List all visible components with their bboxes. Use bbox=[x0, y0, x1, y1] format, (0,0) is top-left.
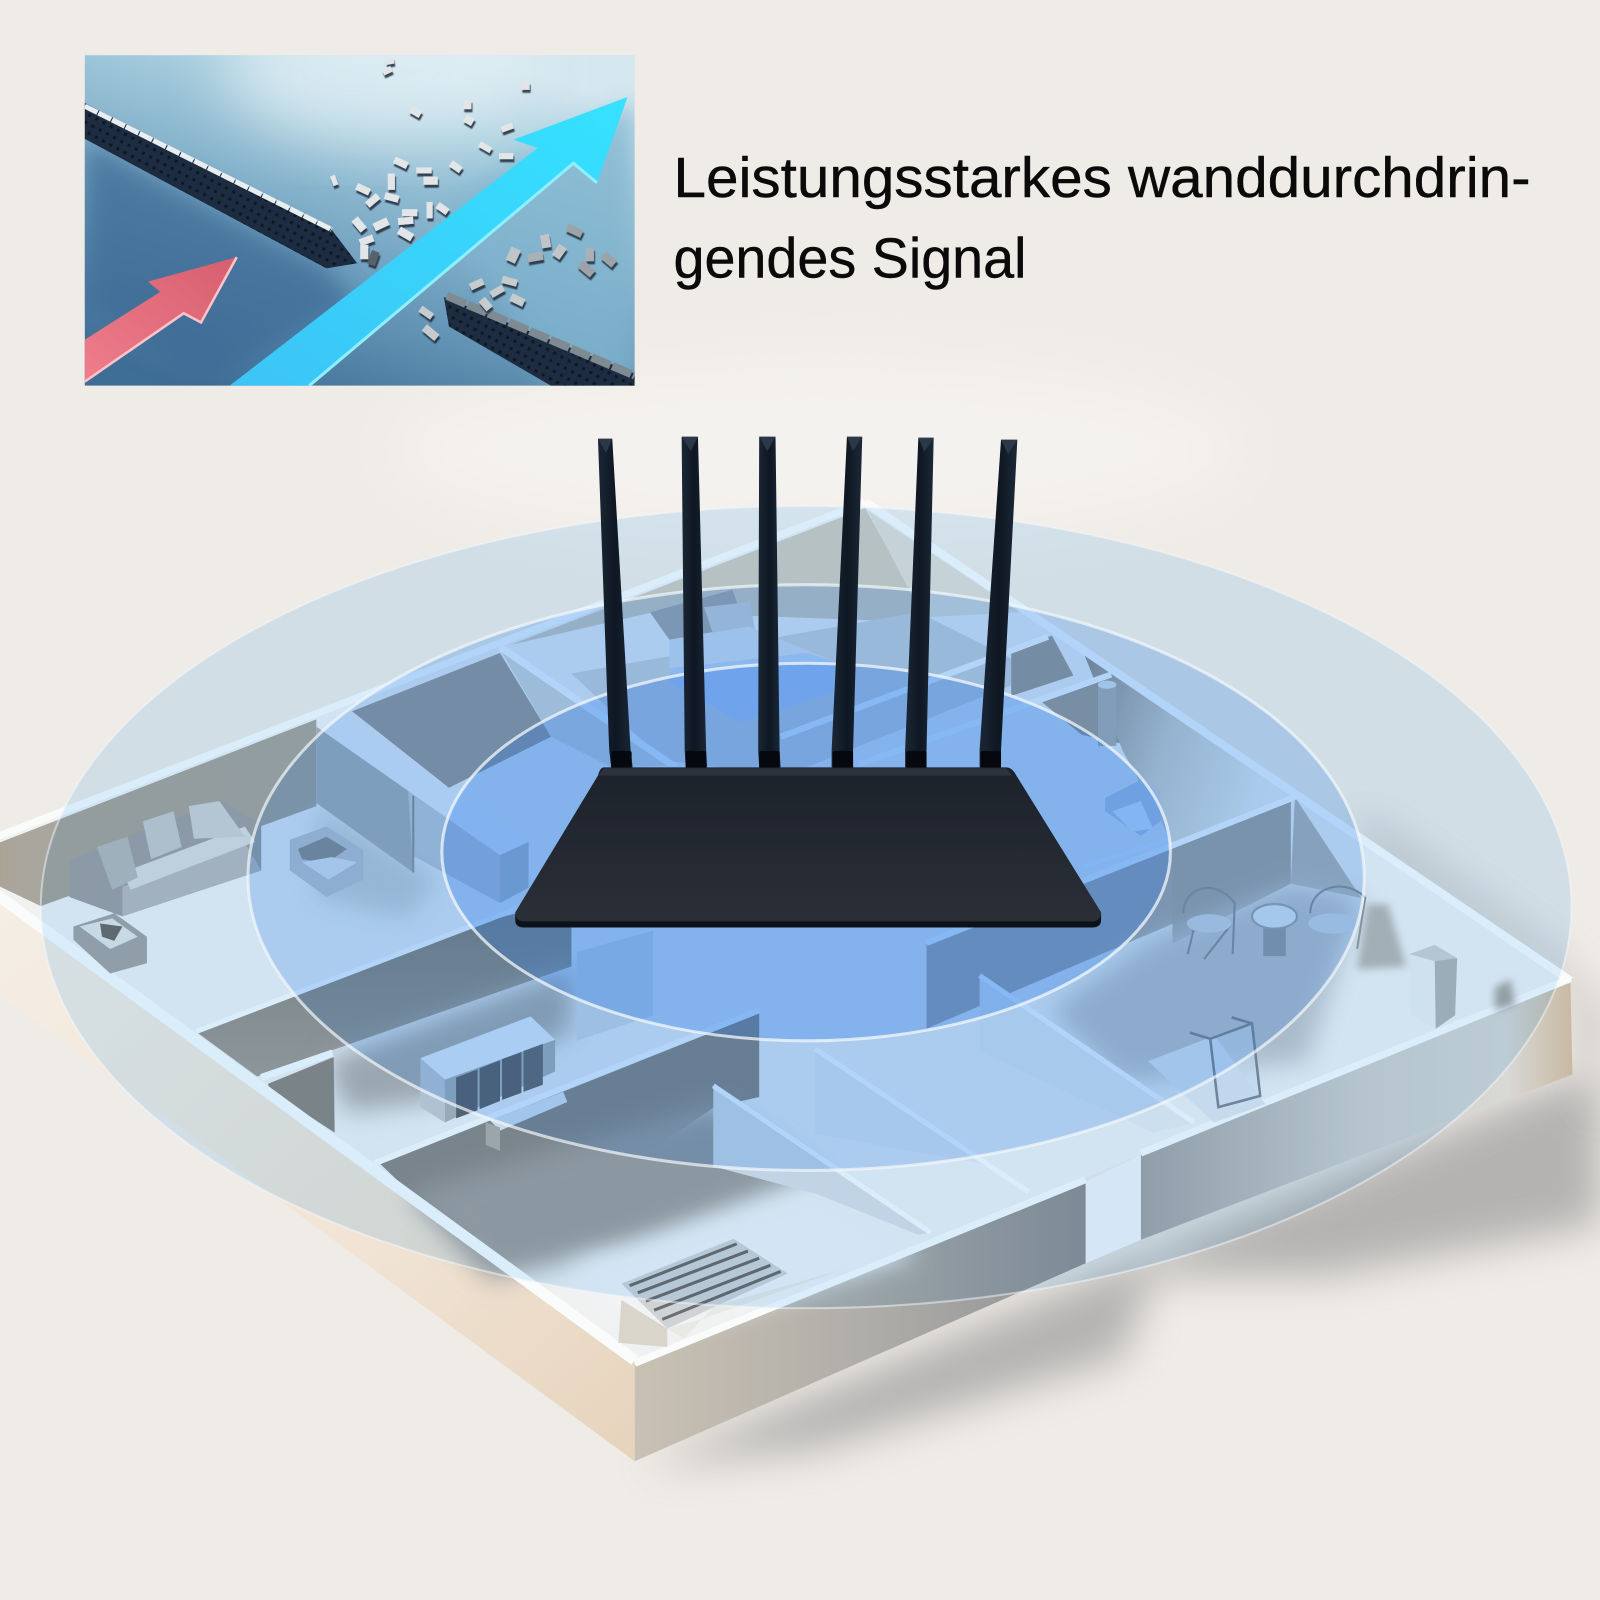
heading line two: gendes Signal bbox=[673, 227, 1027, 290]
router body bbox=[515, 767, 1101, 927]
ring outlines bbox=[41, 506, 1571, 1308]
furniture: chairs and table bbox=[1184, 887, 1365, 959]
photo highlight bbox=[206, 55, 522, 174]
upper left room side wall bbox=[500, 649, 673, 767]
ground shadow bbox=[643, 1078, 1600, 1465]
doorway through wall bbox=[1086, 1155, 1141, 1263]
chair room floor shade bbox=[1051, 884, 1361, 1082]
furniture: small sofa bbox=[73, 913, 147, 973]
antenna 5 bbox=[905, 438, 934, 770]
blue arrow highlight edge bbox=[309, 163, 597, 386]
lower broken wall bbox=[444, 296, 635, 386]
heading text bbox=[673, 146, 1531, 290]
south-east outer wall, left part bbox=[635, 1182, 1086, 1461]
furniture: clothes rack bbox=[1190, 1017, 1260, 1107]
right room wall panel bbox=[927, 847, 1173, 1029]
south-east outer wall, right part bbox=[1141, 981, 1572, 1240]
inner ring blue tint bbox=[442, 663, 1170, 1041]
signal coverage ellipses bbox=[41, 506, 1571, 1308]
furniture: armchair bbox=[290, 827, 363, 897]
heading line one: Leistungsstarkes wanddurchdrin- bbox=[673, 146, 1531, 209]
upper left room grey wall bbox=[352, 653, 551, 788]
chair room side wall bbox=[1291, 797, 1361, 898]
antenna 6 bbox=[980, 440, 1017, 770]
lower partition wall one bbox=[815, 1051, 1029, 1192]
south-west outer wall bbox=[0, 898, 635, 1461]
antenna 4 bbox=[832, 437, 862, 770]
wall rims bbox=[0, 502, 1570, 1363]
router bbox=[515, 437, 1101, 928]
chair room grey wall bbox=[1172, 800, 1291, 944]
building floor plan bbox=[0, 502, 1600, 1465]
floor bbox=[0, 502, 1570, 1360]
inner coverage ring bbox=[442, 663, 1170, 1041]
furniture: kitchen unit bbox=[420, 1016, 567, 1151]
back bedroom floor bbox=[571, 612, 1041, 776]
living room wall bbox=[0, 719, 316, 906]
furniture: bedroom bed bbox=[650, 590, 834, 722]
back bedroom wall bbox=[510, 508, 929, 645]
upper broken wall bbox=[85, 103, 357, 268]
small stub wall bbox=[268, 1057, 335, 1133]
mid wall grey face bbox=[196, 898, 571, 1077]
furniture: heater bbox=[1409, 945, 1457, 1029]
lower partition wall two bbox=[713, 1088, 931, 1235]
furniture: plant shadow bbox=[1357, 904, 1406, 969]
antenna 3 bbox=[758, 437, 781, 770]
background soft light bbox=[388, 357, 1245, 541]
lower bedroom light floor bbox=[571, 1194, 918, 1327]
wall debris bbox=[330, 58, 617, 341]
middle coverage ring bbox=[248, 585, 1364, 1170]
wall shadow tone bbox=[85, 139, 357, 386]
door panel bbox=[577, 931, 653, 1041]
upper right second room wall bbox=[1042, 674, 1122, 744]
right side tone bbox=[439, 102, 635, 386]
mid floor shade bbox=[327, 969, 571, 1112]
living room soft wall shadow bbox=[316, 806, 439, 918]
antenna 2 bbox=[682, 437, 707, 770]
photo: signal breaking through wall bbox=[84, 55, 635, 386]
photo background bbox=[85, 55, 635, 386]
red arrow bbox=[85, 257, 237, 382]
middle ring blue tint bbox=[248, 585, 1364, 1170]
outer coverage ring bbox=[41, 506, 1571, 1308]
furniture: lower bed bbox=[618, 1239, 840, 1347]
router front lip bbox=[515, 914, 1101, 928]
furniture: sofa bbox=[69, 800, 261, 916]
light partition wall bbox=[980, 978, 1194, 1133]
north corner return wall bbox=[867, 510, 1020, 617]
lower room grey floor bbox=[408, 1102, 816, 1281]
router top strip bbox=[598, 768, 1012, 776]
closet block bbox=[316, 711, 529, 903]
lower room back wall bbox=[380, 1012, 759, 1240]
interior north-east wall face bbox=[1082, 648, 1295, 843]
blue arrow bbox=[230, 97, 628, 386]
furniture: column bbox=[1098, 681, 1116, 746]
furniture: floor mat bbox=[1148, 1036, 1265, 1122]
shadow behind north-east wall bbox=[1357, 816, 1600, 1122]
antenna 1 bbox=[598, 439, 633, 770]
upper right small room wall bbox=[1011, 636, 1073, 696]
small wall shadow bbox=[1495, 980, 1515, 1010]
furniture: blue chair bbox=[1084, 779, 1168, 866]
red arrow highlight edge bbox=[85, 257, 237, 382]
